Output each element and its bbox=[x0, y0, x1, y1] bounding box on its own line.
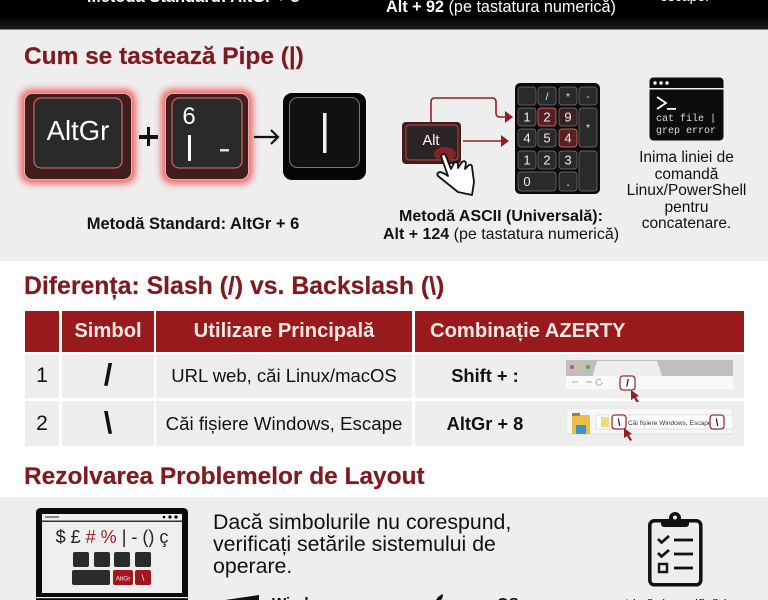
table: symbol comparison bbox=[25, 311, 744, 446]
table header row bbox=[25, 311, 744, 352]
text: layout advice bbox=[213, 510, 511, 578]
icon: laptop: $ £ # % | - () ç bbox=[56, 527, 168, 547]
icon: numeric keypad: 0 bbox=[523, 174, 531, 189]
table row 2: 2 bbox=[36, 412, 48, 435]
icon: Alt key with hand and arrows: Alt bbox=[423, 133, 439, 149]
icon: numeric keypad: * bbox=[566, 92, 570, 103]
icon: numeric keypad: 2 bbox=[543, 110, 551, 124]
icon: plus bbox=[139, 135, 158, 138]
text: layout advice: verificați setările sistemului de bbox=[213, 532, 496, 556]
icon: AltGr key bbox=[15, 84, 141, 189]
table row 2: Căi fișiere Windows, Escape bbox=[166, 413, 402, 434]
icon: 6 key bbox=[156, 84, 258, 189]
icon: terminal window bbox=[650, 78, 724, 140]
icon: browser address bar bbox=[566, 360, 733, 402]
panel: layout section background bbox=[0, 497, 768, 600]
icon: numeric keypad: 4 bbox=[564, 130, 572, 146]
icon: arrow bbox=[254, 129, 280, 145]
table row 2: \ bbox=[104, 405, 112, 440]
table row 2 bbox=[25, 401, 744, 446]
icon: numeric keypad bbox=[515, 83, 600, 194]
caption: ASCII method: Alt + 124 (pe tastatura numerică) bbox=[383, 226, 619, 242]
icon: Apple logo bbox=[436, 594, 443, 600]
icon: Alt key with hand and arrows bbox=[402, 97, 513, 196]
caption: standard method: Metodă Standard: AltGr + 6 bbox=[87, 215, 299, 233]
icon: AltGr key: AltGr bbox=[47, 115, 109, 146]
table header row: Utilizare Principală bbox=[194, 320, 374, 342]
text: pipe description: pentru bbox=[665, 198, 708, 216]
heading: layout troubleshooting: Rezolvarea Problemelor de Layout bbox=[24, 463, 425, 490]
icon: numeric keypad: 5 bbox=[543, 130, 551, 146]
icon: numeric keypad: / bbox=[546, 92, 549, 103]
icon: terminal window: cat file | bbox=[656, 113, 716, 125]
icon: numeric keypad: . bbox=[566, 174, 570, 189]
icon: browser address bar: / bbox=[626, 378, 629, 390]
icon: laptop: AltGr bbox=[116, 576, 131, 582]
icon: Windows logo bbox=[225, 595, 259, 600]
icon: numeric keypad: * bbox=[586, 123, 590, 134]
icon: clipboard checklist bbox=[648, 512, 703, 586]
text: pipe description: Inima liniei de bbox=[639, 149, 734, 166]
heading: pipe: Cum se tastează Pipe (|) bbox=[24, 43, 304, 70]
table row 1: URL web, căi Linux/macOS bbox=[171, 365, 397, 386]
icon: numeric keypad: 1 bbox=[523, 152, 531, 168]
table row 1: 1 bbox=[36, 364, 48, 387]
text: pipe description: Linux/PowerShell bbox=[627, 182, 746, 199]
table row 2: AltGr + 8 bbox=[447, 413, 523, 434]
icon: laptop bbox=[36, 508, 188, 600]
panel: pipe section background bbox=[0, 30, 768, 261]
icon: numeric keypad: 1 bbox=[523, 110, 531, 124]
text: layout advice: operare. bbox=[213, 554, 292, 578]
top black banner bbox=[0, 0, 768, 30]
icon: file explorer path bar: Căi fișiere Windows, Escape bbox=[628, 420, 712, 427]
caption: ASCII method bbox=[383, 208, 619, 242]
caption: ASCII method: Metodă ASCII (Universală): bbox=[399, 208, 603, 225]
text: pipe description: concatenare. bbox=[642, 215, 731, 232]
icon: numeric keypad: 2 bbox=[543, 152, 551, 168]
table header row: Combinație AZERTY bbox=[430, 320, 626, 342]
icon: file explorer path bar bbox=[566, 408, 733, 441]
icon: file explorer path bar: \ bbox=[716, 418, 719, 429]
table header row: Simbol bbox=[74, 320, 142, 342]
icon: file explorer path bar: \ bbox=[618, 418, 621, 429]
icon: 6 key: 6 bbox=[182, 103, 196, 130]
icon: numeric keypad: 3 bbox=[564, 152, 572, 168]
icon: terminal window: grep error bbox=[656, 126, 716, 137]
table row 1: / bbox=[104, 357, 112, 392]
heading: slash vs backslash: Diferența: Slash (/) vs. Backslash (\) bbox=[24, 273, 444, 300]
table row 1: Shift + : bbox=[451, 365, 519, 386]
icon: pipe key result bbox=[283, 93, 366, 180]
text: pipe description: comandă bbox=[655, 166, 718, 182]
icon: numeric keypad: 9 bbox=[564, 110, 572, 124]
icon: laptop: \ bbox=[142, 573, 145, 583]
text: layout advice: Dacă simbolurile nu corespund, bbox=[213, 510, 511, 534]
icon: numeric keypad: - bbox=[586, 92, 590, 103]
text: pipe description bbox=[627, 149, 746, 232]
icon: numeric keypad: 4 bbox=[523, 130, 531, 146]
table row 1 bbox=[25, 354, 744, 398]
